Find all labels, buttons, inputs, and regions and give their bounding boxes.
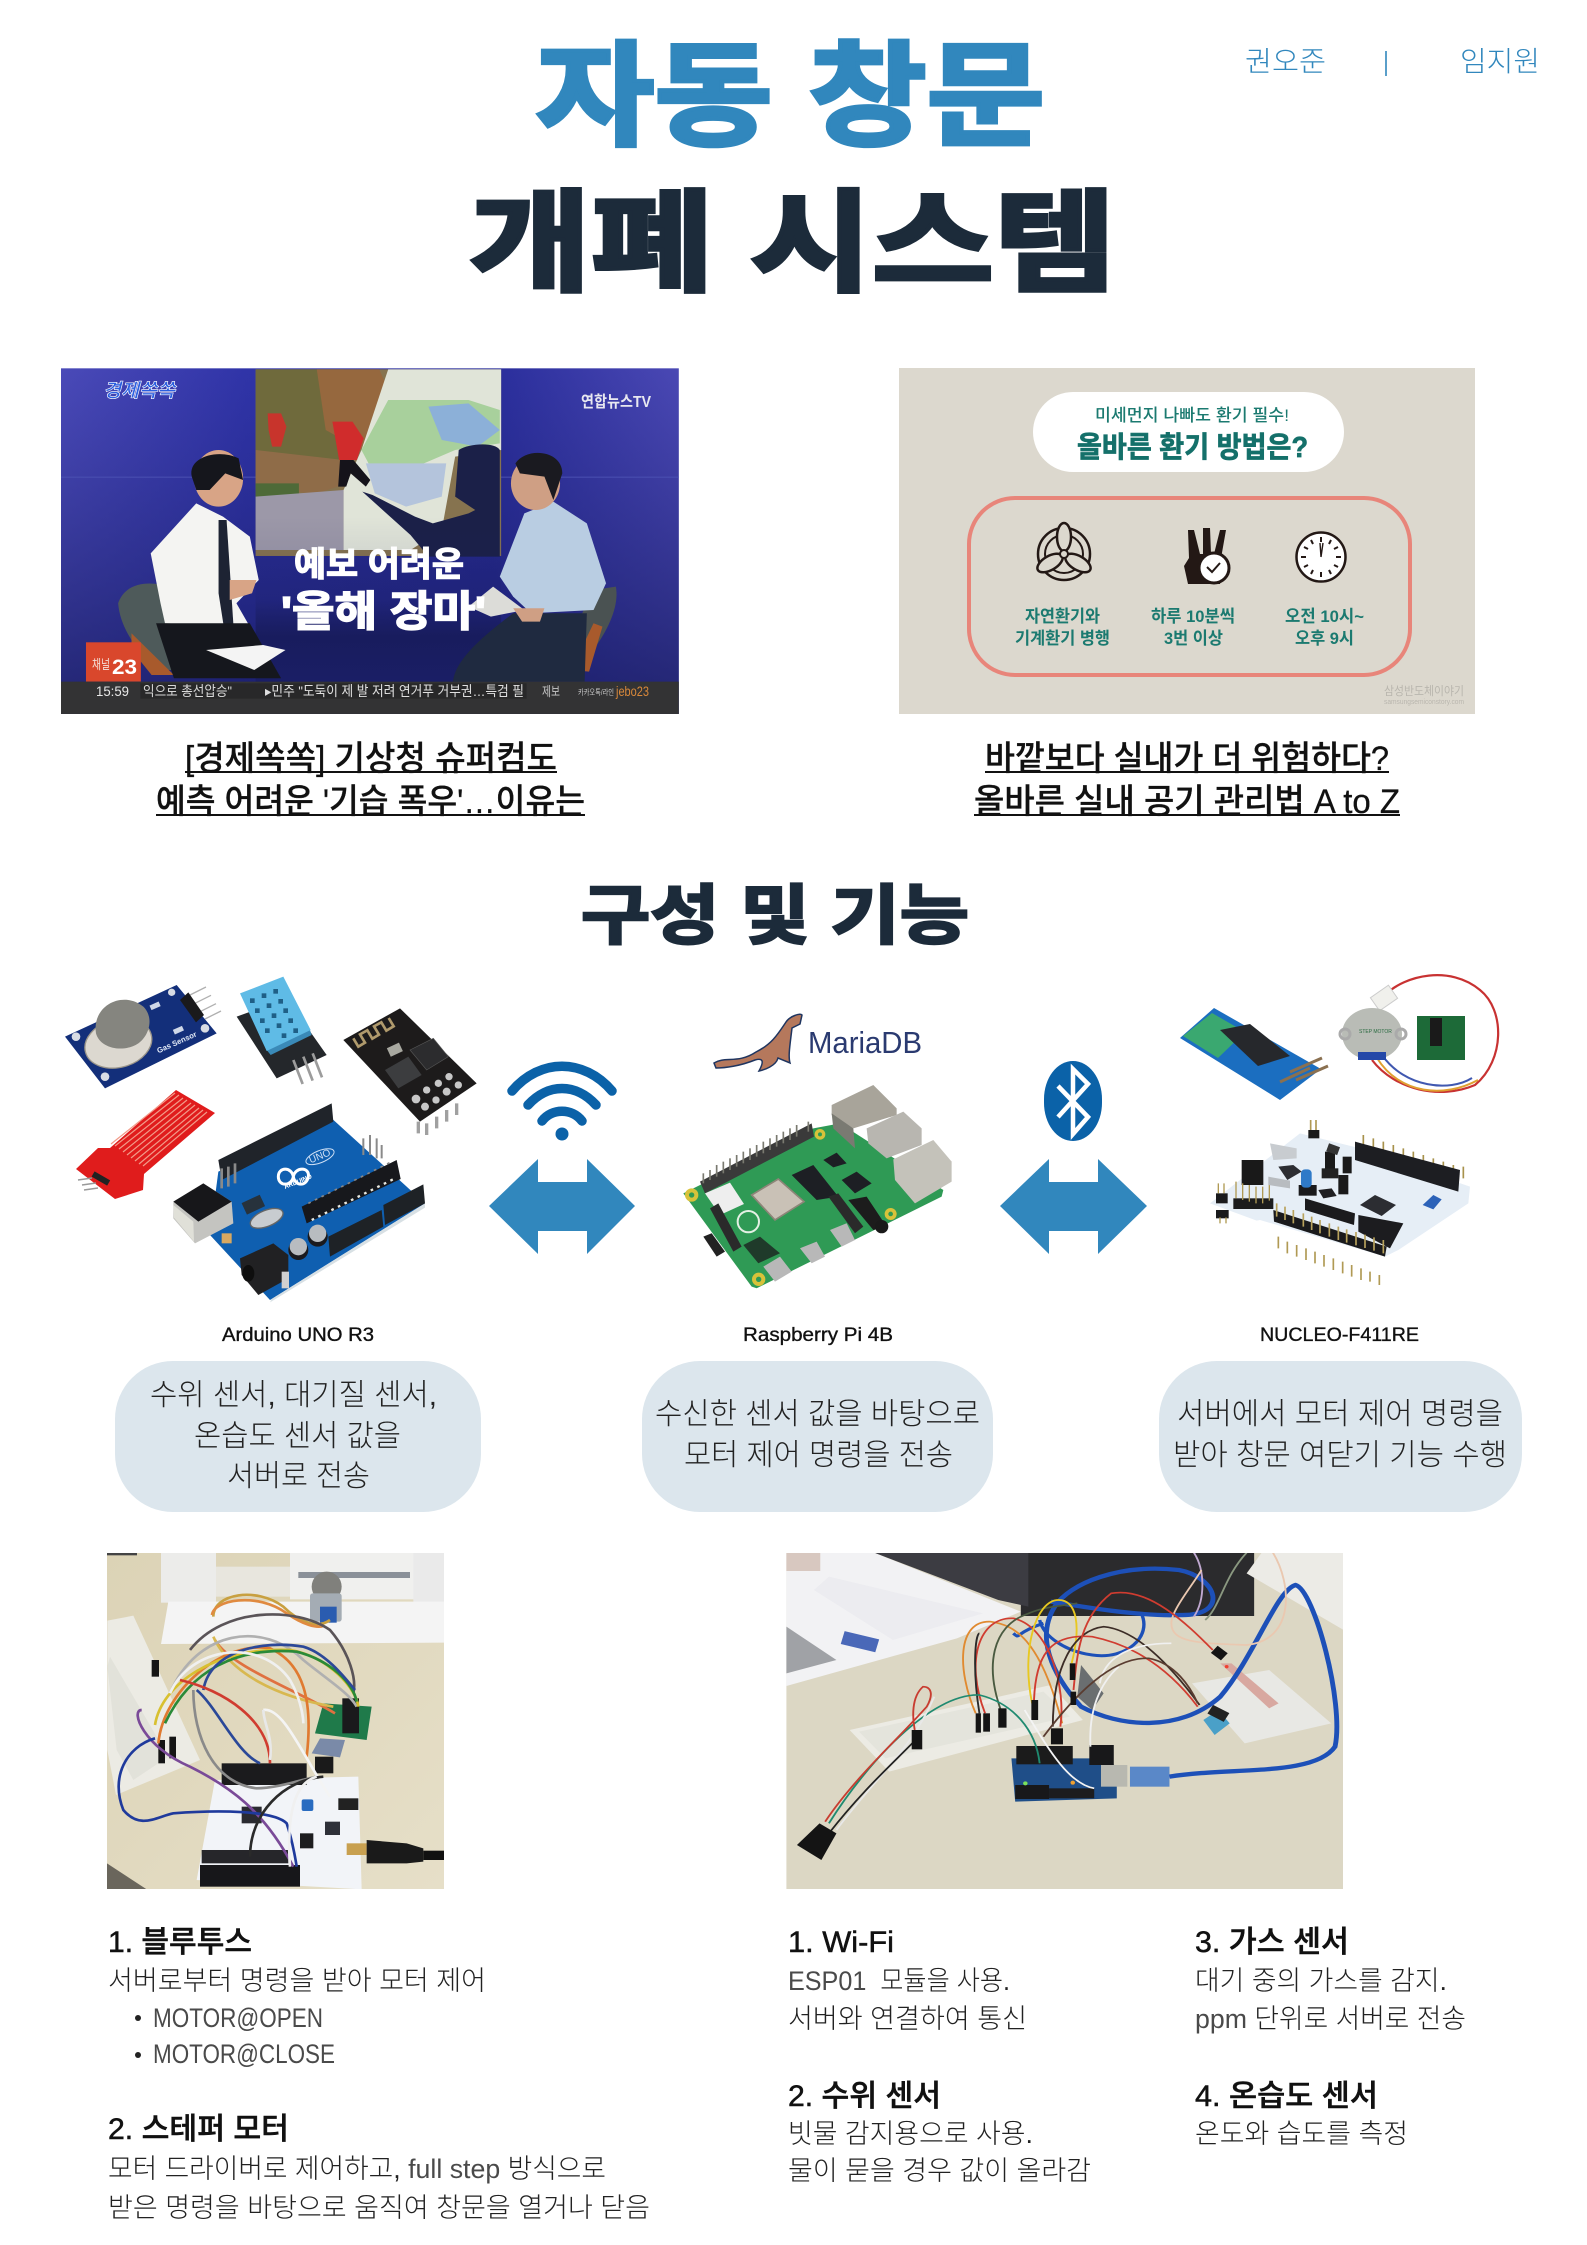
Raspberry Pi board — [683, 1085, 952, 1288]
white title pill: 미세먼지 나빠도 환기 필수! — [1095, 406, 1289, 425]
text: water sensor — [788, 2080, 1091, 2186]
text: temperature humidity sensor: 4. 온습도 센서 — [1195, 2080, 1378, 2113]
pill: NUCLEO description — [1159, 1361, 1522, 1512]
MariaDB logo: MariaDB — [808, 1025, 922, 1060]
news image: 카카오톡/라인 — [578, 687, 614, 697]
text: bluetooth: 1. 블루투스 — [108, 1926, 252, 1959]
text: gas sensor: 대기 중의 가스를 감지. — [1195, 1966, 1447, 1996]
NUCLEO-F411RE board — [1210, 1120, 1470, 1285]
label: Arduino UNO R3: Arduino UNO R3 — [222, 1325, 374, 1346]
text: bluetooth — [108, 1926, 486, 2069]
stepper motor, driver and wires — [1340, 975, 1498, 1092]
watermark: 삼성반도체이야기 — [1384, 684, 1464, 698]
icon labels: 자연환기와 — [1025, 607, 1100, 626]
icon: clock — [1296, 532, 1346, 582]
caption: news link: [경제쏙쏙] 기상청 슈퍼컴도 — [185, 740, 557, 778]
label: Raspberry Pi 4B: Raspberry Pi 4B — [743, 1325, 893, 1346]
arrow: bluetooth double arrow — [1000, 1159, 1147, 1254]
news image: '올해 장마' — [281, 588, 486, 635]
section heading: 구성 및 기능 — [581, 879, 969, 952]
photo: Arduino with sensors — [786, 1553, 1344, 1889]
news image: jebo23 — [615, 683, 649, 699]
text: stepper motor — [108, 2113, 650, 2223]
pill: NUCLEO description: 서버에서 모터 제어 명령을 — [1177, 1398, 1503, 1431]
Arduino UNO board: ARDUINO — [283, 1173, 313, 1191]
news image: 익으로 총선압승" — [143, 683, 232, 699]
caption: air quality link: 올바른 실내 공기 관리법 A to Z — [974, 783, 1400, 821]
text: temperature humidity sensor: 온도와 습도를 측정 — [1195, 2119, 1408, 2149]
text: wifi: 서버와 연결하여 통신 — [788, 2004, 1027, 2034]
icon: three fingers with clock — [1184, 528, 1229, 584]
text: stepper motor: 2. 스테퍼 모터 — [108, 2113, 289, 2146]
bluetooth module HC-06 — [1180, 1008, 1328, 1100]
icon labels: 오전 10시~ — [1285, 607, 1364, 626]
text: water sensor: 물이 묻을 경우 값이 올라감 — [788, 2156, 1091, 2186]
caption: news link — [156, 740, 585, 821]
text: bluetooth: MOTOR@CLOSE — [153, 2039, 335, 2069]
icon labels — [1015, 607, 1364, 648]
Arduino UNO board — [173, 1103, 425, 1302]
text: gas sensor — [1195, 1926, 1466, 2034]
text: wifi — [788, 1926, 1027, 2034]
news image: ▸민주 "도둑이 제 발 저려 연거푸 거부권…특검 필 — [265, 683, 524, 699]
wifi module ESP-01 — [343, 1008, 477, 1135]
authors: 권오준 — [1245, 46, 1326, 77]
news image: 예보 어려운 — [294, 546, 464, 584]
caption: news link: 예측 어려운 '기습 폭우'…이유는 — [156, 783, 585, 821]
icon labels: 하루 10분씩 — [1151, 607, 1235, 626]
pill: NUCLEO description: 받아 창문 여닫기 기능 수행 — [1173, 1439, 1507, 1472]
watermark — [1384, 684, 1464, 706]
text: stepper motor: 모터 드라이버로 제어하고, full step 방식으로 — [108, 2154, 606, 2184]
news image: 제보 — [542, 684, 560, 699]
humidity sensor DHT11 — [237, 977, 327, 1084]
pill: Raspberry Pi description — [642, 1361, 993, 1512]
pill: Raspberry Pi description: 수신한 센서 값을 바탕으로 — [655, 1398, 980, 1431]
text: temperature humidity sensor — [1195, 2080, 1408, 2149]
icon labels: 기계환기 병행 — [1015, 629, 1110, 648]
pill: Raspberry Pi description: 모터 제어 명령을 전송 — [684, 1439, 953, 1472]
ventilation image — [899, 368, 1475, 714]
icon: fan — [1034, 523, 1094, 580]
caption: air quality link — [974, 740, 1400, 821]
text: wifi: 1. Wi-Fi — [788, 1926, 894, 1959]
text: wifi: ESP01 모듈을 사용. — [788, 1966, 1010, 1996]
pill: Arduino description: 서버로 전송 — [227, 1460, 370, 1493]
watermark: samsungsemiconstory.com — [1384, 699, 1464, 706]
icon: wifi — [512, 1066, 612, 1140]
icon: bluetooth — [1044, 1061, 1102, 1141]
news image: 23 — [112, 656, 137, 679]
news image: 15:59 — [96, 683, 129, 699]
caption: air quality link: 바깥보다 실내가 더 위험하다? — [985, 740, 1389, 778]
gas sensor — [65, 985, 221, 1088]
water level sensor — [76, 1090, 215, 1199]
text: gas sensor: 3. 가스 센서 — [1195, 1926, 1349, 1959]
title: 개폐 시스템: 개폐 시스템 — [469, 182, 1116, 306]
white title pill — [1033, 392, 1344, 472]
pill: Arduino description: 온습도 센서 값을 — [194, 1420, 401, 1453]
text: gas sensor: ppm 단위로 서버로 전송 — [1195, 2004, 1466, 2034]
news image: 연합뉴스TV — [581, 393, 651, 411]
icon labels: 3번 이상 — [1164, 629, 1223, 648]
news image — [61, 368, 679, 714]
gas sensor: Gas Sensor — [155, 1030, 198, 1055]
MariaDB logo — [714, 1014, 922, 1071]
authors: 임지원 — [1460, 46, 1540, 77]
title: 자동 창문: 자동 창문 — [536, 34, 1045, 161]
sensors: gas, humidity, wifi module — [65, 977, 477, 1135]
coral frame — [969, 498, 1410, 675]
authors — [1245, 46, 1540, 77]
icon labels: 오후 9시 — [1295, 629, 1354, 648]
Arduino UNO board: UNO — [308, 1148, 333, 1166]
text: bluetooth: MOTOR@OPEN — [153, 2003, 323, 2033]
news image: 채널 — [92, 657, 110, 672]
text: stepper motor: 받은 명령을 바탕으로 움직여 창문을 열거나 닫음 — [108, 2193, 650, 2223]
arrow: wifi double arrow — [489, 1159, 635, 1254]
text: bluetooth: 서버로부터 명령을 받아 모터 제어 — [108, 1966, 486, 1996]
news image: 경제쏙쏙 — [103, 381, 178, 402]
photo: window prototype with NUCLEO — [107, 1553, 444, 1889]
pill: Arduino description — [115, 1361, 481, 1512]
stepper motor, driver and wires: STEP MOTOR — [1359, 1029, 1392, 1035]
text: water sensor: 2. 수위 센서 — [788, 2080, 941, 2113]
label: NUCLEO-F411RE: NUCLEO-F411RE — [1260, 1325, 1419, 1346]
text: water sensor: 빗물 감지용으로 사용. — [788, 2119, 1033, 2149]
pill: Arduino description: 수위 센서, 대기질 센서, — [150, 1379, 437, 1412]
white title pill: 올바른 환기 방법은? — [1077, 431, 1308, 464]
